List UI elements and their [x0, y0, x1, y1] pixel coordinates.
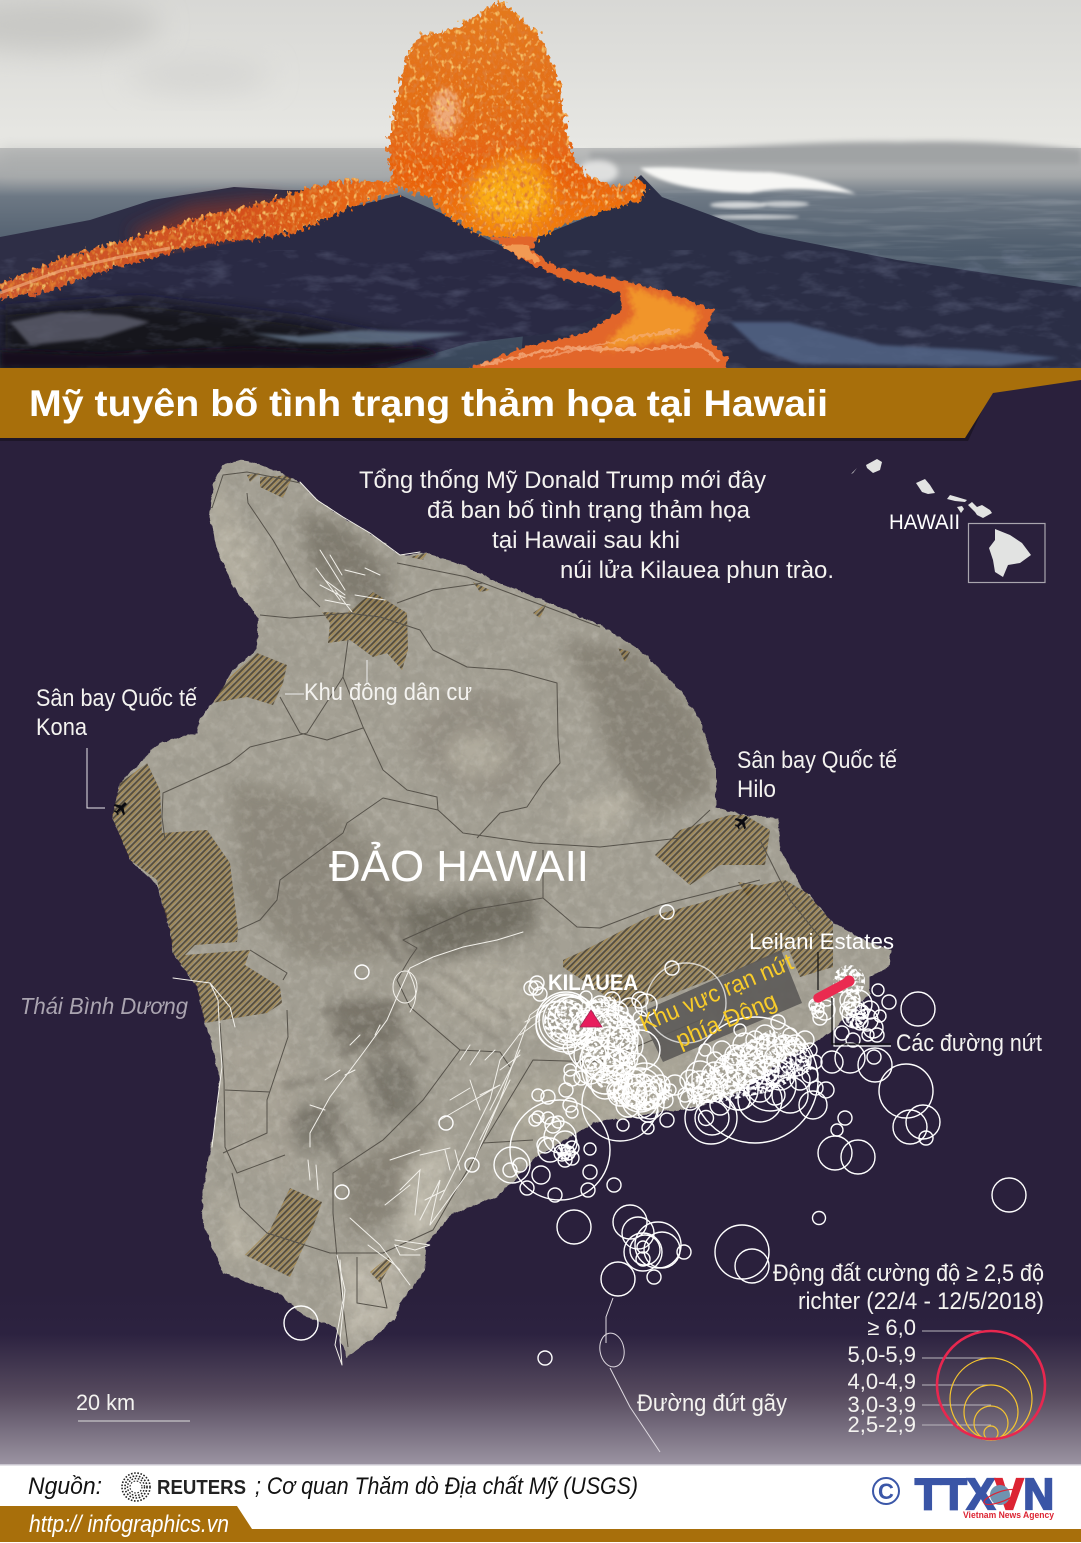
label: island name: ĐẢO HAWAII — [329, 841, 589, 891]
leader: Kona — [87, 748, 105, 808]
dense earthquake clusters — [544, 965, 866, 1161]
legend: earthquake magnitude: Động đất cường độ ≥ 2,5 độ — [773, 1260, 1044, 1287]
legend: earthquake magnitude: 5,0-5,9 — [848, 1342, 916, 1367]
label: residential area: Khu đông dân cư — [304, 679, 472, 706]
label: Pacific Ocean: Thái Bình Dương — [20, 993, 188, 1019]
intro text: núi lửa Kilauea phun trào. — [560, 557, 834, 584]
logo: TTXVN: Vietnam News Agency — [963, 1510, 1055, 1521]
label: Kona airport: Sân bay Quốc tế — [36, 685, 198, 712]
label: Hilo airport — [737, 747, 898, 803]
fissure marker — [818, 976, 854, 998]
label: fissures: Các đường nứt — [896, 1030, 1042, 1057]
legend: earthquake magnitude: 3,0-3,9 — [848, 1392, 916, 1417]
source text: ; Cơ quan Thăm dò Địa chất Mỹ (USGS) — [255, 1473, 638, 1500]
website: http:// infographics.vn — [29, 1511, 229, 1538]
icon: Reuters logo — [122, 1473, 150, 1501]
scale bar: 20 km — [76, 1390, 135, 1415]
left mountain — [0, 187, 420, 300]
source text: REUTERS — [157, 1477, 246, 1499]
Kilauea marker — [580, 1010, 602, 1027]
label: Kona airport: Kona — [36, 714, 88, 741]
label: residential area — [285, 660, 472, 706]
right cone — [520, 175, 1081, 368]
fault lines — [173, 482, 550, 1365]
intro text — [359, 467, 834, 584]
legend: earthquake magnitude: 4,0-4,9 — [848, 1369, 916, 1394]
label: rift zone: Khu vực rạn nứt — [636, 948, 798, 1038]
legend: earthquake magnitude: ≥ 6,0 — [867, 1315, 916, 1340]
label: Hawaii: HAWAII — [889, 511, 960, 534]
legend: earthquake magnitude — [773, 1260, 1045, 1440]
leader: Leilani — [817, 952, 819, 990]
logo: TTXVN: C — [878, 1479, 894, 1504]
photo: erupting volcano — [0, 0, 1081, 372]
Mauna Loa lava streaks — [285, 885, 510, 1175]
source text — [28, 1473, 638, 1500]
source text: Nguồn: — [28, 1473, 102, 1500]
legend: earthquake magnitude: richter (22/4 - 12/5/2018) — [798, 1288, 1044, 1315]
fountain — [388, 2, 648, 240]
label: Kilauea: KILAUEA — [548, 970, 638, 995]
label: rift zone: phía Đông — [672, 987, 781, 1054]
leader: fissures — [832, 998, 891, 1046]
cooled lava — [10, 312, 1060, 366]
title: Mỹ tuyên bố tình trạng thảm họa tại Hawaii — [29, 383, 828, 424]
label: fault line: Đường đứt gãy — [637, 1390, 787, 1417]
label: Hilo airport: Hilo — [737, 776, 776, 803]
title banner — [0, 368, 1081, 441]
label: Hilo airport: Sân bay Quốc tế — [737, 747, 898, 774]
bottom gradient — [0, 1290, 1081, 1465]
intro text: đã ban bố tình trạng thảm họa — [427, 497, 751, 524]
map: Hawaii island — [100, 450, 910, 1370]
label: Leilani Estates: Leilani Estates — [749, 929, 894, 954]
lava river — [460, 237, 728, 372]
locator map: Hawaiian islands — [851, 459, 1045, 582]
logo: TTXVN: TTXVN — [915, 1470, 1054, 1519]
callout: eastern rift zone box — [639, 950, 802, 1062]
label: Kona airport — [36, 685, 198, 741]
steam — [578, 160, 856, 220]
fault line — [597, 1298, 660, 1452]
intro text: Tổng thống Mỹ Donald Trump mới đây — [359, 467, 766, 494]
scale bar — [76, 1390, 190, 1421]
icon: plane Kona — [111, 798, 131, 818]
center cone under flow — [0, 195, 621, 368]
roads — [162, 472, 830, 1347]
earthquake circles — [284, 905, 1026, 1365]
left lava flow — [0, 180, 400, 300]
icon: plane Hilo — [732, 812, 752, 832]
footer — [0, 1464, 1081, 1543]
intro text: tại Hawaii sau khi — [492, 527, 680, 554]
rock shading — [0, 300, 420, 368]
residential hatch zones — [112, 473, 833, 1283]
legend: earthquake magnitude: 2,5-2,9 — [848, 1412, 916, 1437]
